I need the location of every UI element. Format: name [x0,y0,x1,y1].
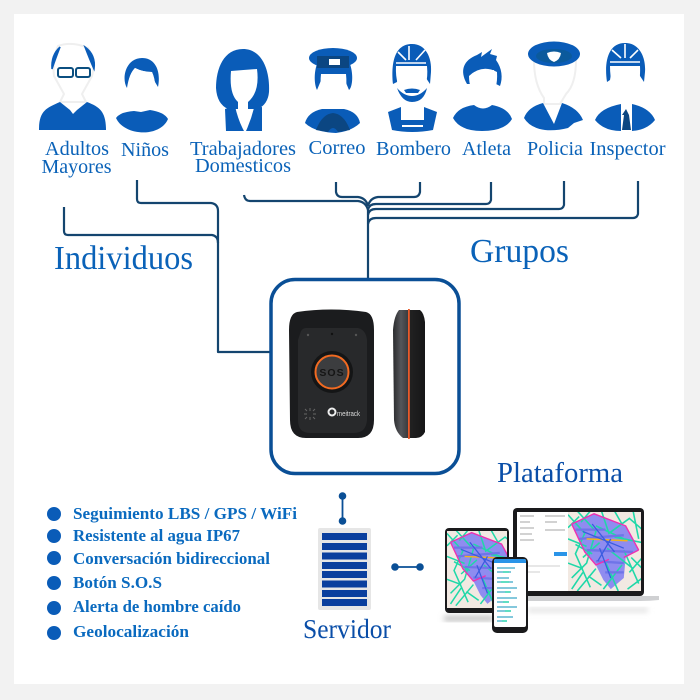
icon: atleta [453,49,512,131]
feature 2: Resistente al agua IP67 [73,526,240,545]
label: policia: Policia [527,139,583,160]
device front [289,310,374,438]
shadows [444,608,648,621]
label: atleta: Atleta [462,139,511,160]
connector: server to platform [391,563,424,571]
feature 5: Alerta de hombre caído [73,597,241,616]
laptop [510,508,659,601]
speaker [304,408,316,420]
icon: bombero [388,44,437,132]
feature 6: Geolocalización [73,622,189,641]
feature 4: Botón S.O.S [73,573,162,592]
icon: server rack [318,528,371,610]
icon: inspector [595,43,655,131]
connector: device to server [339,492,346,525]
heading: servidor: Servidor [303,614,391,644]
label: bombero: Bombero [376,139,451,160]
label: adultos mayores [42,139,112,178]
icon: niños [116,58,168,132]
label: inspector: Inspector [590,139,666,160]
connector lines: grupos [244,181,638,279]
tablet [445,528,509,613]
label: adultos mayores: Adultos [45,139,109,160]
feature 3: Conversación bidireccional [73,549,270,568]
icon: adultos mayores [39,44,106,130]
label: trabajadores domesticos: Domesticos [195,156,291,177]
feature list [47,504,297,641]
sos button: SOS [319,367,345,379]
label: trabajadores domesticos: Trabajadores [190,139,296,160]
feature 1: Seguimiento LBS / GPS / WiFi [73,504,297,523]
label: adultos mayores: Mayores [42,157,112,178]
heading: grupos: Grupos [470,233,569,270]
heading: individuos: Individuos [54,240,193,277]
phone [492,557,528,633]
platform devices [444,508,659,633]
icon: policia [524,42,583,130]
device side [393,309,425,439]
heading: plataforma: Plataforma [497,457,623,489]
label: trabajadores domesticos [190,139,296,177]
icon: correo [305,48,360,133]
label: niños: Niños [121,140,169,161]
connector lines: individuos [64,180,270,352]
panel: device frame [271,280,459,474]
label: correo: Correo [308,138,366,159]
icon: trabajadores domesticos [216,49,269,131]
logo: meitrack [337,409,360,418]
